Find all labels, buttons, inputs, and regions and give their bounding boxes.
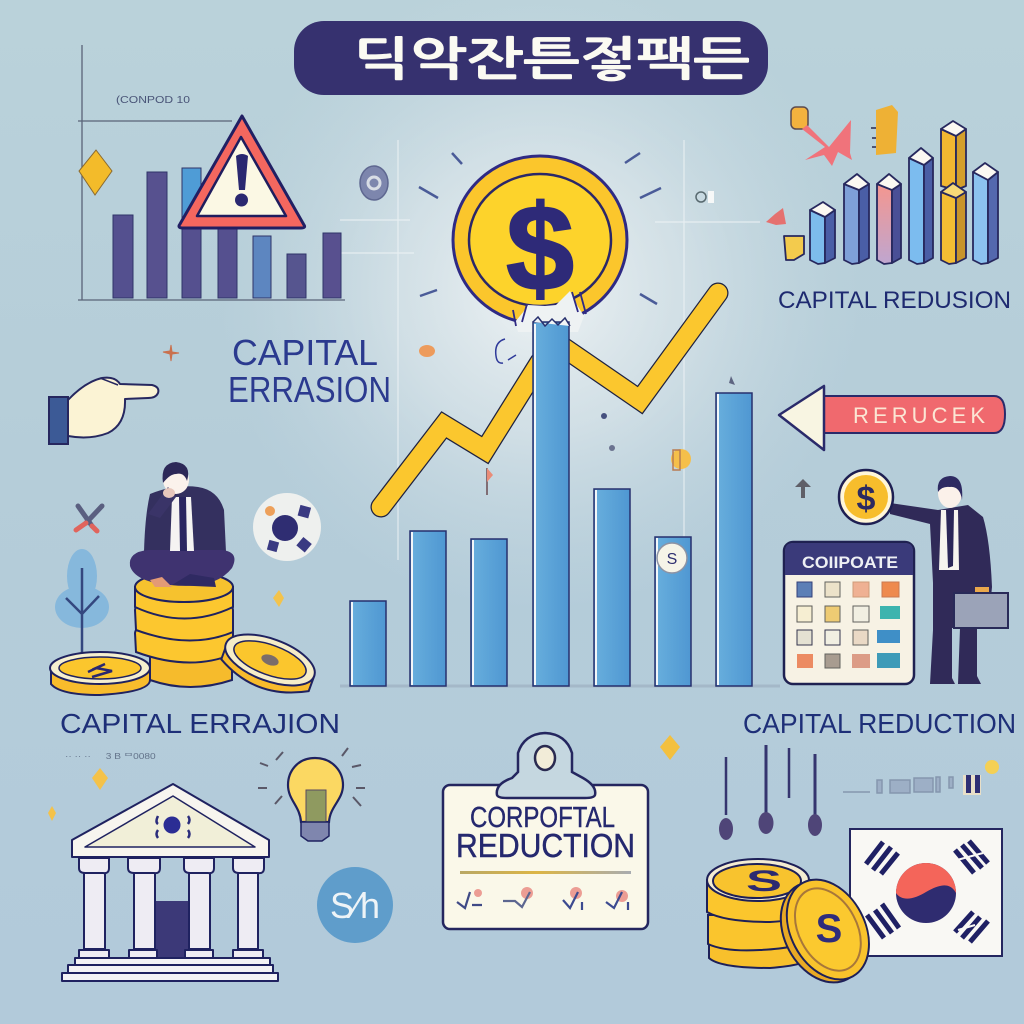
head xyxy=(163,466,189,494)
bank building xyxy=(62,784,278,981)
icon: scissors xyxy=(76,506,102,531)
main bar chart xyxy=(340,317,780,686)
taegeuk xyxy=(896,863,956,923)
icon: light bulb xyxy=(258,748,365,841)
coin cracks xyxy=(513,292,586,326)
icon: tree xyxy=(55,549,109,653)
small coin on bar: S xyxy=(667,551,677,568)
head xyxy=(938,478,962,508)
flat coin left xyxy=(50,652,150,695)
broken bar top xyxy=(533,317,570,326)
faint skyline icons xyxy=(843,760,999,795)
columns xyxy=(79,858,264,958)
small caption left bottom: ·· ·· ·· ᅠ 3 B ᄆ0080ᅠ xyxy=(65,752,165,761)
standing businessman xyxy=(839,470,1008,684)
icon: yellow diamond xyxy=(79,150,112,195)
corporate calendar card: COIIPOATE xyxy=(802,553,898,572)
small coin on bar xyxy=(657,543,687,573)
bar chart: warning chart top left xyxy=(78,45,345,300)
hanging pins xyxy=(719,745,822,840)
korean emblem xyxy=(156,816,190,838)
coin stack with seated person xyxy=(50,462,321,703)
icon: sparkles xyxy=(48,768,108,821)
title banner xyxy=(294,21,768,95)
coin stack with tilted coin: S xyxy=(816,907,842,951)
seated person xyxy=(130,462,234,587)
icon: up arrow marker xyxy=(795,479,811,498)
shirt and tie xyxy=(170,497,194,551)
held coin xyxy=(839,470,893,524)
tilted coin right xyxy=(216,624,321,703)
trigrams xyxy=(866,841,988,942)
3D bar chart: top right xyxy=(784,121,998,264)
steps xyxy=(62,958,278,981)
dollar sign: $ xyxy=(506,180,574,316)
doorway xyxy=(155,901,191,957)
coin stack xyxy=(135,572,233,687)
icon: broken red arrow and blocks xyxy=(766,105,898,225)
small chart caption: (CONPOD 10 xyxy=(116,95,191,106)
chart bars xyxy=(113,168,341,298)
icon: small target xyxy=(360,166,388,200)
label: capital errajion: CAPITAL ERRAJION xyxy=(60,708,340,739)
coin stack with tilted coin: S xyxy=(746,865,782,898)
shirt and tie xyxy=(939,510,959,570)
percent badge xyxy=(317,867,393,943)
pediment xyxy=(72,784,269,857)
heading: capital errasion: ERRASION xyxy=(228,369,391,410)
icon: white circle token xyxy=(253,493,321,561)
label: capital redusion: CAPITAL REDUSION xyxy=(778,287,1011,314)
clipboard clip xyxy=(497,733,595,798)
calendar icons xyxy=(797,582,900,668)
corporate reduction card xyxy=(443,733,648,929)
reduce arrow: RERUCEK xyxy=(853,403,985,428)
coin stack with tilted coin xyxy=(707,859,885,997)
percent badge: S⁄h xyxy=(330,885,380,926)
corporate reduction card: REDUCTION xyxy=(456,827,635,864)
corporate calendar card xyxy=(784,542,914,684)
cube small xyxy=(784,236,804,260)
briefcase xyxy=(975,587,989,593)
coin rays xyxy=(419,153,661,304)
icon: pointing hand xyxy=(49,378,158,444)
icon: sparkle xyxy=(273,590,284,607)
reduce arrow xyxy=(779,386,1005,450)
floating debris xyxy=(163,191,735,495)
korean flag xyxy=(850,829,1002,956)
heading: capital errasion: CAPITAL xyxy=(232,332,378,373)
icon: warning triangle xyxy=(179,116,305,228)
title banner: 딕악잔튼젛팩든 xyxy=(353,33,750,85)
standing businessman: $ xyxy=(857,480,876,518)
tilted front coin xyxy=(764,865,885,997)
label: capital reduction: CAPITAL REDUCTION xyxy=(743,708,1016,739)
card heading: CORPOFTAL xyxy=(470,802,615,834)
mini icons xyxy=(457,887,628,910)
heading: capital errasion xyxy=(228,332,391,410)
yellow trend line xyxy=(381,293,718,507)
yellow sparkle xyxy=(660,735,680,760)
central coin xyxy=(419,153,661,363)
